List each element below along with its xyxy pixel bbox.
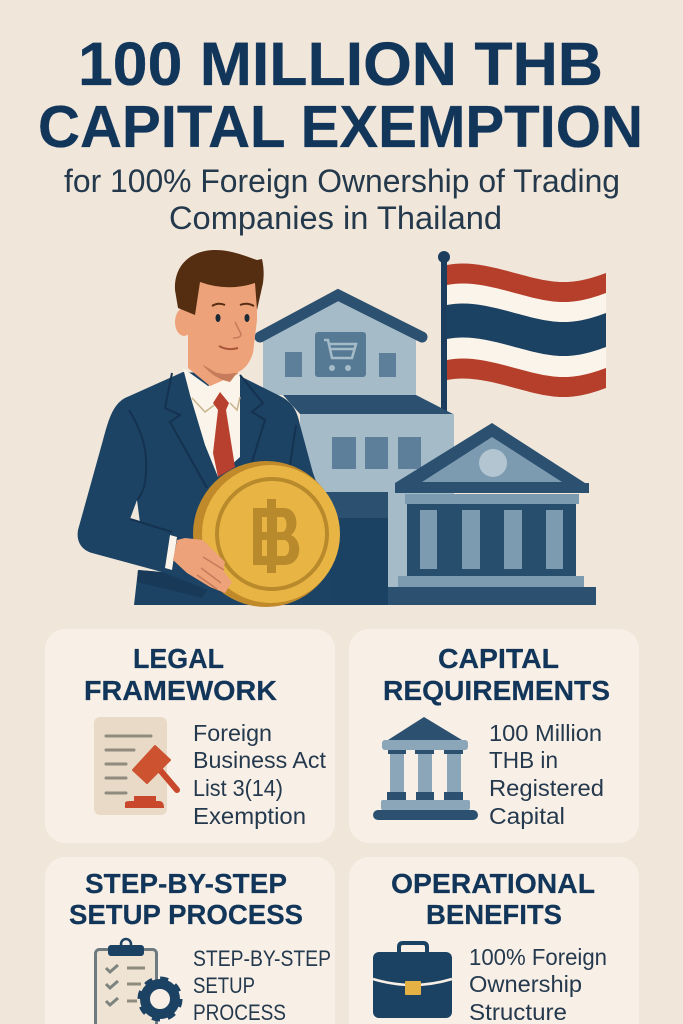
text: operational benefits [469, 944, 607, 1024]
man: collar line [192, 397, 240, 412]
text: legal framework: Exemption [193, 803, 306, 829]
man: tie [213, 392, 235, 477]
text: capital requirements: THB in [489, 747, 558, 773]
text: capital requirements: 100 Million [489, 720, 602, 746]
icon: document and gavel [94, 717, 177, 815]
heading: capital requirements: CAPITAL [438, 643, 559, 674]
man: eyes and features [212, 304, 254, 349]
icon: clipboard and gear [96, 939, 179, 1024]
illustration: businessman [78, 250, 330, 605]
subtitle: Companies in Thailand [169, 200, 502, 236]
heading: step-by-step setup process: STEP-BY-STEP [85, 868, 287, 899]
man: sleeve shadow [137, 570, 208, 598]
panel: step-by-step setup process [45, 857, 335, 1024]
man: hair [175, 250, 264, 315]
man: arm gap [130, 500, 140, 523]
heading: legal framework [84, 643, 277, 706]
text: step-by-step setup process [193, 946, 331, 1024]
title: CAPITAL EXEMPTION [38, 94, 643, 160]
heading: operational benefits: OPERATIONAL [391, 868, 595, 899]
heading: step-by-step setup process [69, 868, 303, 930]
heading: legal framework: LEGAL [133, 643, 224, 674]
illustration: baht coin [193, 461, 340, 607]
heading: capital requirements: REQUIREMENTS [383, 675, 610, 706]
panel: operational benefits [349, 857, 639, 1024]
man: face [188, 282, 257, 374]
man: shirt [183, 368, 240, 477]
text: capital requirements: Capital [489, 803, 565, 829]
text: capital requirements: Registered [489, 775, 604, 801]
icon: briefcase [373, 943, 452, 1018]
man: suit [78, 372, 330, 605]
heading: capital requirements [383, 643, 610, 706]
heading: step-by-step setup process: SETUP PROCESS [69, 899, 303, 930]
title: 100 MILLION THB [78, 30, 603, 98]
subtitle: for 100% Foreign Ownership of Trading [64, 163, 620, 199]
heading: legal framework: FRAMEWORK [84, 675, 277, 706]
text: legal framework: Foreign [193, 720, 272, 746]
text: legal framework [193, 720, 327, 829]
title [38, 30, 643, 160]
illustration: trading store building [260, 295, 454, 605]
text: step-by-step setup process: STEP-BY-STEP [193, 946, 331, 971]
panel: legal framework [45, 629, 335, 843]
icon: pillared institution [373, 717, 478, 820]
text: operational benefits: Ownership [469, 971, 582, 997]
man: jaw shadow [197, 357, 237, 382]
illustration: hand holding coin [165, 535, 232, 593]
text: step-by-step setup process: SETUP [193, 973, 255, 998]
man: ear [175, 308, 193, 336]
man: lapels [129, 373, 296, 532]
text: legal framework: Business Act [193, 747, 327, 773]
text: capital requirements [489, 720, 604, 829]
subtitle [64, 163, 620, 236]
man: neck [188, 340, 238, 386]
text: legal framework: List 3(14) [193, 775, 283, 801]
illustration: bank building [388, 423, 596, 605]
heading: operational benefits [391, 868, 595, 930]
panel: capital requirements [349, 629, 639, 843]
heading: operational benefits: BENEFITS [426, 899, 562, 930]
illustration: Thai flag [438, 251, 606, 412]
text: operational benefits: 100% Foreign [469, 944, 607, 970]
